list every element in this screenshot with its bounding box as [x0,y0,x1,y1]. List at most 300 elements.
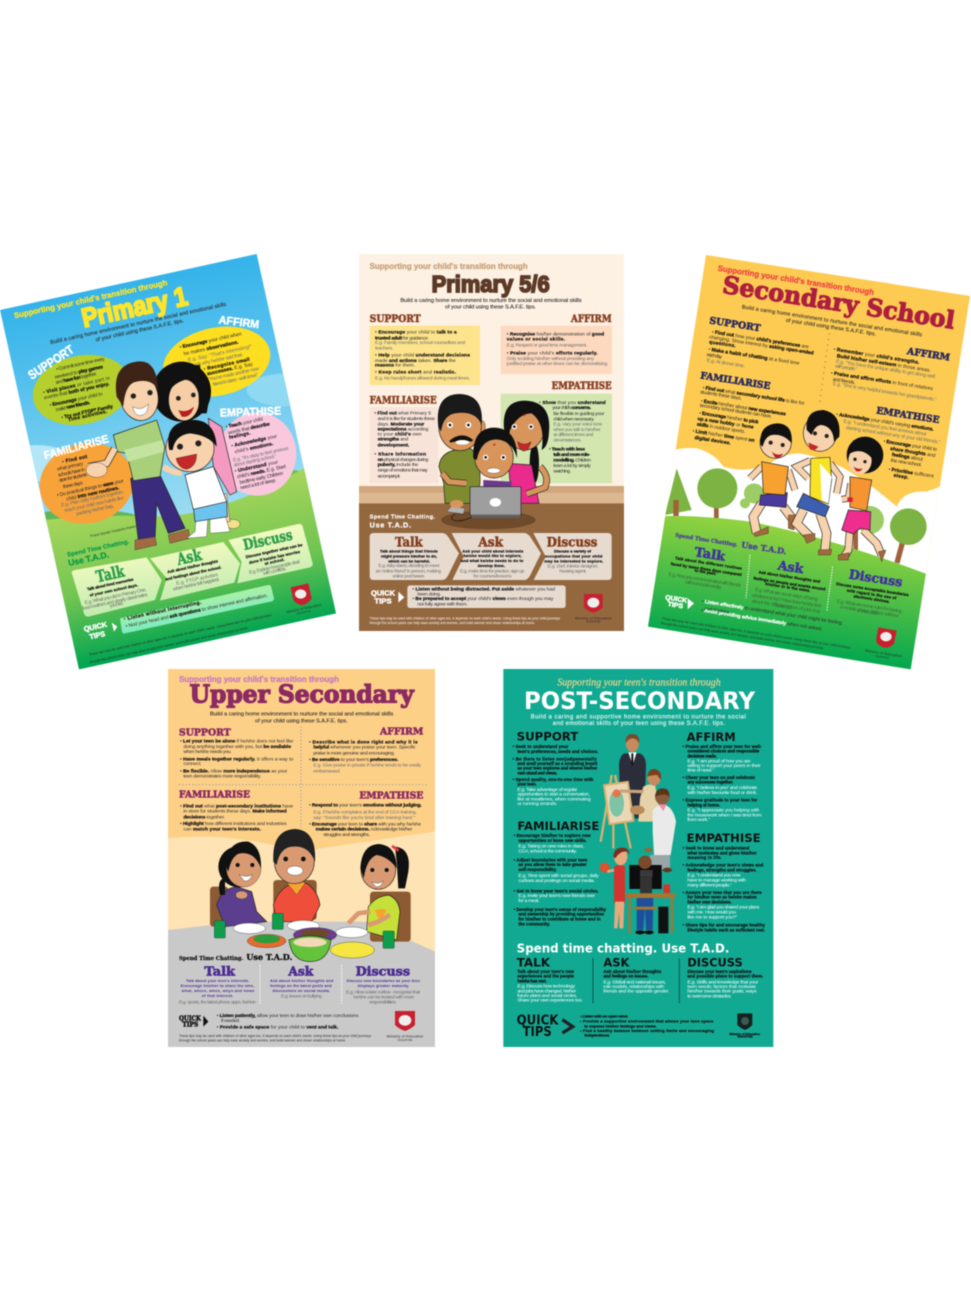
footer note: These tips may be used with children of other ages too, it depends on each child's needs. Using these tips as your child journeys [89,613,272,657]
panel: affirm: • Praise your child's efforts regularly. [507,350,598,356]
heading: spend time chatting: Spend time chatting. Use T.A.D. [517,940,729,955]
panel: discuss: displays greater maturity. [358,983,409,988]
panel: discuss: Discuss a variety of [554,548,592,553]
icon: ministry crest: SINGAPORE [875,655,890,660]
heading: spend time chatting: Spend Time Chatting. [675,533,738,548]
panel: affirm: Only scolding him/her without providing any [507,356,594,362]
panel: affirm bubble: • Recognise small [203,357,251,373]
panel: quick tips [83,585,274,641]
panel: quick tips: TIPS [374,596,392,605]
panel: quick tips: • Listen effectively to understand what your child might be feeling [701,599,842,626]
panel: familiarise: • Find out what Primary 5 [374,411,431,417]
panel: empathise: circumstances. [553,437,582,443]
panel: affirm: and friends. [832,377,856,386]
intro text: of your child using these S.A.F.E. tips. [445,305,536,311]
panel: discuss: a data plan? [856,608,881,617]
panel: discuss: Discuss [356,965,410,979]
intro text: Build a caring home environment to nurture the social and emotional skills [741,304,923,338]
panel: quick tips [371,585,566,608]
panel: familiarise: the community. [518,921,550,926]
panel: familiarise: • Share information [374,452,426,458]
panel: support: questions. [709,339,737,350]
panel: discuss: teen needs; factors that motivate [687,984,756,990]
panel: empathise: lifestyle habits such as sufficient rest. [687,928,765,933]
panel: empathise: • Seek to know and understand [683,846,750,851]
poster: Primary 1 [0,250,340,671]
panel: ask: E.g. make time for practice, sign up [460,568,525,574]
panel: empathise: watching. [553,468,571,474]
panel: support: teachers. [375,345,393,351]
panel: familiarise bubble: store for students [58,472,88,484]
icon: ministry crest: SINGAPORE [296,609,312,616]
panel: ask: E.g. FTGP activities [176,572,219,587]
title: Upper Secondary: Upper Secondary [190,680,415,709]
title: Primary 1: Primary 1 [79,281,190,333]
panel: familiarise: curfews and postings on social media. [518,878,595,884]
panel: discuss: him/her towards their goals; ways [687,989,757,995]
panel: talk: of your own school days. [89,582,138,598]
title: Primary 5/6: Primary 5/6 [432,271,550,297]
panel: familiarise: skills in outdoor sports. [696,422,746,435]
panel: talk: Talk about things that friends [380,548,438,553]
dividers [593,958,679,1003]
footer note [370,616,560,625]
panel: familiarise: for a meal. [518,898,539,904]
panel: familiarise: FAMILIARISE [700,370,771,392]
panel: ask: Ask about his/her thoughts and [270,978,334,983]
panel: talk: which can be harmful. [387,558,430,563]
panel: support: • Encourage your child to talk to a [375,329,457,335]
panel: discuss: electronic devices. [853,593,890,604]
panel: empathise: feelings about [891,452,924,463]
panel: support: doing anything together with you, but be available [183,744,291,750]
panel: talk: without social media. [685,579,722,591]
icon: ministry crest: Ministry of Education [729,1032,760,1036]
icon: ministry crest [729,1013,760,1039]
panel: familiarise bubble: teach your child new habits like [64,495,125,514]
panel: ask: him/her or in the news. [765,581,811,593]
panel: affirm: E.g. "I am proud of how you are [687,759,751,765]
panel: quick tips: • Listen patiently, allow your teen to draw his/her own conclusions [217,1013,359,1019]
panel: familiarise: for him/her to contribute at home and in [518,916,601,921]
panel: ask: when he/she felt happiest. [172,577,220,593]
footer note: through the school years can help ease anxiety and worries, and build warmer and closer relationships at home. [179,1039,346,1043]
panel: familiarise: • Find out what secondary school life is like for [702,385,805,407]
intro text: Build a caring home environment to nurture the social and emotional skills [400,298,582,304]
poster: Upper Secondary [168,669,435,1047]
panel: support bubble: SUPPORT [26,343,77,383]
panel: empathise: • Show that you understand [539,400,606,406]
panel: empathise: • Acknowledge your child's varying emotions. [836,412,935,433]
panel: discuss: Discuss new boundaries as your teen [347,978,421,983]
panel: empathise: for him/her even as he/she makes [687,895,757,900]
panel: talk: E.g. risky dares; deciding to meet [378,563,440,569]
panel: empathise bubble: • Understand your [234,459,279,475]
panel: ask: wholesome fun? How does he/she feel [751,593,821,609]
panel: empathise bubble: child's emotions. [234,441,274,455]
panel: empathise: E.g. "I am glad you shared your plans [687,905,760,911]
panel: affirm bubble: and ask why he/she said that. [185,352,244,370]
panel: talk: of that interest. [202,993,233,998]
panel: discuss: E.g. Allow a later curfew - recognise that [346,989,421,995]
panel: support: trusted adult for guidance. [375,335,429,341]
intro text: Build a caring and supportive home environment to nurture the social [531,714,746,720]
panel: quick tips: TIPS [667,601,684,610]
panel: ask: Ask [174,545,204,569]
intro text: of your child using these S.A.F.E. tips. [95,318,184,343]
icon: ministry crest: Ministry of Education [865,649,902,658]
intro text: and emotional skills of your teen using these S.A.F.E. tips. [553,721,725,727]
panel: familiarise: strengths and [378,437,409,443]
panel: support: E.g. No handphones allowed during meal times. [375,375,470,381]
panel: empathise bubble [218,406,296,496]
heading: spend time chatting [179,952,293,962]
panel: support: made and actions taken. Share the [375,358,456,364]
panel: discuss: occupations that your child [545,553,603,558]
panel: support: your teen. [517,782,537,787]
heading: supporting line: Supporting your child's transition through [13,278,168,320]
panel: affirm: AFFIRM [570,314,612,325]
panel: ask [603,956,669,995]
panel: quick tips: QUICK [179,1014,201,1022]
panel: ask: role models, relationships with [603,984,664,990]
panel: familiarise: FAMILIARISE [179,790,250,801]
panel: discuss: may be interested to explore. [544,558,603,563]
panel: affirm: the housework when I was tired from [687,812,762,818]
panel: familiarise: CCA, school or the community. [518,849,577,855]
intro text: of your child using these S.A.F.E. tips. [785,318,877,338]
panel: discuss: Discuss together what can be [245,542,304,559]
poster: Post-Secondary [503,669,773,1047]
panel: affirm bubble: friend in class - well done!" [212,372,259,388]
panel: ask: and feelings about the school. [165,565,222,582]
panel: quick tips: been doing. [417,591,441,597]
panel: support: like at mealtimes, when commuting [517,796,591,802]
panel: quick tips: independence. [584,1033,610,1038]
panel: discuss: DISCUSS [687,956,743,970]
panel: discuss: with conflicts. [262,566,287,577]
panel: empathise: E.g. "I understand you feel anxious about [843,419,927,438]
heading: spend time chatting: Spend Time Chatting. [370,515,435,521]
panel: quick tips: • Listen with an open mind. [580,1014,628,1019]
panel: discuss [533,533,612,580]
panel: talk: to the past. [694,568,717,576]
panel: quick tips [517,1013,715,1040]
intro text: of your child using these S.A.F.E. tips. [255,718,348,724]
panel: empathise [836,405,941,481]
panel: empathise: share thoughts and [890,446,936,459]
panel: support: each day. [706,352,723,360]
panel: empathise bubble: • Teach your child [225,416,264,430]
icon: ministry crest: SINGAPORE [737,1036,753,1039]
panel: discuss: housing agent. [559,569,587,575]
panel: ask [751,557,826,615]
panel: affirm [501,314,612,374]
panel: support [179,727,294,780]
panel: quick tips: • Provide a supportive environment that allows your teen space [580,1019,714,1024]
panel: empathise bubble: child's needs. E.g. Start [236,464,287,480]
panel: talk [179,965,256,1005]
panel: ask: about the different types of jobs that [751,598,821,615]
panel: familiarise [514,819,607,926]
panel: quick tips: TIPS [523,1025,552,1040]
panel: affirm: Build his/her self-esteem in those areas. [836,353,931,374]
panel: talk: TALK [517,956,551,970]
panel: empathise: sleep. [893,473,910,481]
panel: empathise: feelings, strengths and struggles. [687,868,757,873]
panel: familiarise [692,370,805,447]
panel: familiarise bubble: child into new routines. [66,485,120,503]
panel: support bubble: and have fun together. [55,371,97,386]
panel: support: • Let your teen be alone if he/she does not feel like [180,739,294,745]
panel: ask [452,533,541,580]
panel: affirm: • Describe what is done right and why it is [309,739,418,745]
panel: empathise bubble: • Acknowledge your [231,433,278,449]
heading: spend time chatting: Use T.A.D. [741,539,788,556]
panel: empathise: • Teach with less [549,447,585,453]
panel: discuss: a mobile phone faith or without [840,604,900,619]
panel: support: • Make a habit of chatting at a fixed time [708,347,800,367]
panel: discuss: and possible plans to support them. [687,974,763,979]
panel: familiarise: digital devices. [694,435,732,447]
panel: affirm: helping at home. [687,802,720,807]
illustration: family at dining table [210,829,411,962]
panel: familiarise: • Highlight how different institutions and industries [180,821,287,827]
panel: support: or running errands. [517,801,557,807]
panel: affirm bubble: he makes observations. [183,339,240,357]
panel: affirm: • Remember your child's strengths. [833,347,921,366]
panel: empathise: with me. How would you [687,909,736,915]
icon: ministry crest [387,1011,423,1042]
panel: talk: Share your own experiences too. [517,998,583,1004]
panel: familiarise: puberty, include the [378,462,419,468]
panel: talk: and jobs have changed, his/her [517,988,576,994]
panel: familiarise: secondary school students can have. [699,403,772,420]
panel: talk: food routines and clearly classmates [82,592,149,612]
panel: discuss [228,524,313,583]
panel: empathise: EMPATHISE [876,405,940,426]
panel: affirm: AFFIRM [379,727,423,738]
panel: familiarise: FAMILIARISE [517,819,599,833]
panel: familiarise [179,790,294,833]
panel: support bubble: • Try out FTGP* Family [61,404,114,421]
panel: quick tips: QUICK [371,588,396,597]
panel: familiarise [370,395,438,483]
panel: talk: Talk about the different routines [675,555,743,571]
panel: affirm: justified praise at other times can be demoralising. [506,361,608,367]
panel: empathise: like me to support you?" [687,914,738,920]
panel: empathise: • Acknowledge your teen's views and [683,863,764,868]
panel: empathise: • Encourage your child to [883,439,938,453]
panel: support [706,315,814,370]
panel: familiarise: FAMILIARISE [370,395,437,406]
panel: affirm: AFFIRM [687,730,736,744]
panel: familiarise bubble: schools have in [57,467,86,479]
panel: quick tips: TIPS [89,629,106,641]
panel: empathise: struggles and strengths. [323,832,370,838]
panel: discuss: to overcome obstacles. [687,993,732,999]
divider [819,333,829,405]
intro text [531,714,746,727]
panel: empathise: when you talk to him/her [553,427,601,433]
panel: familiarise: • Develop your teen's sense of responsibility [514,907,607,912]
panel: talk: E.g. How you communicated with friends [668,572,742,589]
panel: support: connect. [183,761,202,767]
panel: support: E.g. At dinner time. [706,358,745,370]
panel: talk: Talk [94,561,127,586]
panel: support: teen's preferences, needs and choices. [517,749,598,754]
panel: support: and avail yourself as a sounding board [517,761,598,766]
panel: support: reasons for them. [375,363,415,369]
panel: empathise: the new school. [890,458,922,468]
panel: affirm: values or social skills. [507,337,566,343]
panel: ask: Ask about his/her thoughts [167,558,219,574]
panel: talk: E.g. Discuss how technology [517,984,575,990]
panel: affirm: considered choices and responsible [687,749,760,754]
panel: affirm: E.g. "She is very helpful towards her grandparents." [832,381,937,403]
panel: empathise bubble: E.g. "It's okay to feel anxious [232,446,290,464]
panel: talk: Talk [694,544,726,564]
panel: support: changing. Show interest by asking open-ended [709,334,814,357]
panel: ask: Ask [477,535,504,551]
panel: talk: you had. [109,600,124,609]
panel: support: • Seek to understand your [513,744,569,749]
panel: quick tips: • Avoid providing advice immediately when not asked. [701,608,823,633]
panel: discuss [687,956,763,999]
panel: affirm: • Express gratitude to your teen for [683,798,758,803]
panel: support: E.g. Family members, school counsellors and [375,340,465,346]
panel: affirm: E.g. Respect or good time management. [507,342,587,348]
panel: support: SUPPORT [517,729,579,743]
panel: empathise bubble: words that describe [227,421,271,436]
panel: discuss: Discuss [848,566,904,590]
title: Secondary School: Secondary School [721,270,957,335]
panel: ask: feelings on the latest posts and [270,983,332,988]
panel: empathise: EMPATHISE [552,381,612,392]
divider [746,555,750,598]
footer note: These tips may be used with children of other ages too, it depends on each child's needs. Using these tips as your child journeys [662,616,851,650]
panel: ask: Ask about his/her thoughts [603,969,662,974]
panel: familiarise: in store for students these days. Make informed [183,809,287,815]
panel: talk: Talk [395,535,423,551]
icon: ministry crest [286,583,322,616]
panel: support bubble: Time activities. [67,409,108,423]
panel: support bubble [26,343,137,434]
panel: affirm bubble: successes. E.g. Say [206,361,254,377]
panel: ask: and feelings on issues. [603,974,648,979]
heading: spend time chatting [370,515,435,529]
panel: quick tips: • Listen without being distracted. Put aside whatever you had [412,587,555,593]
title: POST-SECONDARY: POST-SECONDARY [524,687,756,715]
panel: familiarise: as you allow them to take greater [518,862,587,867]
panel: empathise: EMPATHISE [687,831,761,845]
panel: support [370,314,480,385]
poster: Secondary School [640,250,971,671]
intro text: Build a caring home environment to nurture the social and emotional skills [50,302,227,346]
panel: support bubble: • Encourage your child to [49,391,103,409]
heading: supporting line: Supporting your teen's transition through [557,678,721,689]
panel: ask: he/she would like to explore, [463,553,522,558]
panel: support [513,729,598,807]
panel: affirm: • Praise and affirm your teen for well- [683,744,762,749]
panel: talk: might pressure him/her to do, [381,553,437,558]
panel: talk: Talk [204,965,236,979]
panel: affirm: praise is more genuine and encouraging. [313,750,395,756]
panel: talk: E.g. What you did in Primary One, [84,587,147,606]
panel: empathise: • Prioritise sufficient [888,467,935,480]
illustration: three runners [750,410,886,562]
panel: discuss: E.g. Skills and knowledge that your [687,979,759,985]
panel: affirm: • Be sensitive to your teen's preferences. [309,757,399,763]
panel: empathise: • Encourage your teen to share with you why he/she [309,822,421,828]
panel: empathise [309,790,423,838]
panel: quick tips: TIPS [182,1021,198,1029]
panel: empathise: • Assure your teen that you are there [683,890,762,895]
panel: support: • Find out how your child's preferences are [711,329,809,350]
icon: ministry crest: SINGAPORE [398,1039,413,1042]
panel: familiarise bubble: packing his/her bag. [76,503,115,517]
panel: quick tips: QUICK [517,1013,559,1028]
panel: affirm: E.g. Give praise in private if he/she tends to be easily [313,763,421,769]
panel: talk: Encourage him/her to share the who, [181,983,254,988]
panel: empathise: child when necessary. [553,417,594,423]
panel: familiarise bubble: FAMILIARISE [43,433,111,462]
panel: empathise: many different people." [687,883,732,889]
panel: familiarise bubble: what primary [56,461,84,473]
panel: discuss: Discuss [242,527,294,554]
panel: empathise: modelling. Children [553,458,591,464]
icon: ministry crest [865,627,902,660]
panel: empathise: starting school without any of your old friends." [845,425,941,446]
panel: familiarise: • Limit his/her time spent on [692,428,755,444]
panel: ask: friends and the opposite gender. [603,989,669,995]
heading: supporting line: Supporting your child's transition through [179,675,339,684]
heading: spend time chatting [675,533,788,556]
panel: affirm: • Cheer your teen on and celebrate [683,775,756,780]
panel: talk [72,557,162,617]
panel: ask: Ask [776,557,805,576]
panel: affirm: E.g. "I appreciate you helping with [687,808,760,814]
panel: familiarise: and 6 is like for students these [378,416,435,422]
panel: empathise: E.g. If he/she complains at the end of CCA training, [313,809,417,815]
panel: support bubble: weekend to play games [54,364,104,381]
panel: familiarise: • Encourage him/her to pick [699,410,759,426]
panel: ask: Ask your child about interests [462,548,524,553]
panel: ask: discussions on social media. [272,988,330,993]
panel: empathise bubble: about starting school." [233,453,277,469]
panel: support: • Help your child understand decisions [375,353,470,359]
heading: spend time chatting: Spend Time Chatting. [179,956,243,962]
panel: empathise: meaning in life. [687,855,722,860]
panel: ask: E.g. Global and national issues, [603,979,666,985]
panel: familiarise bubble: these days. [62,480,84,490]
panel: support: own stand and views. [517,770,557,775]
icon: ministry crest: Ministry of Education [286,603,322,614]
panel: familiarise: expectations according [378,427,429,433]
panel: familiarise: • Get to know your teen's social circles. [514,888,599,893]
panel: empathise: talk and more role- [553,452,590,458]
panel: support: opportunities to start a conversation, [517,792,590,798]
panel: affirm [683,730,762,823]
panel: affirm: any successes together. [687,780,733,785]
panel: talk: faced by teens these days compared [671,561,743,577]
panel: talk: Talk about your teen's interests. [186,978,249,983]
panel: empathise: E.g. "I understand you now [687,873,741,879]
panel: affirm: time of need." [687,768,714,774]
panel: support: SUPPORT [179,727,231,738]
panel: familiarise bubble: • Do practical things to ease your [56,478,125,499]
panel: support: • Have meals together regularly. It offers a way to [180,756,294,762]
